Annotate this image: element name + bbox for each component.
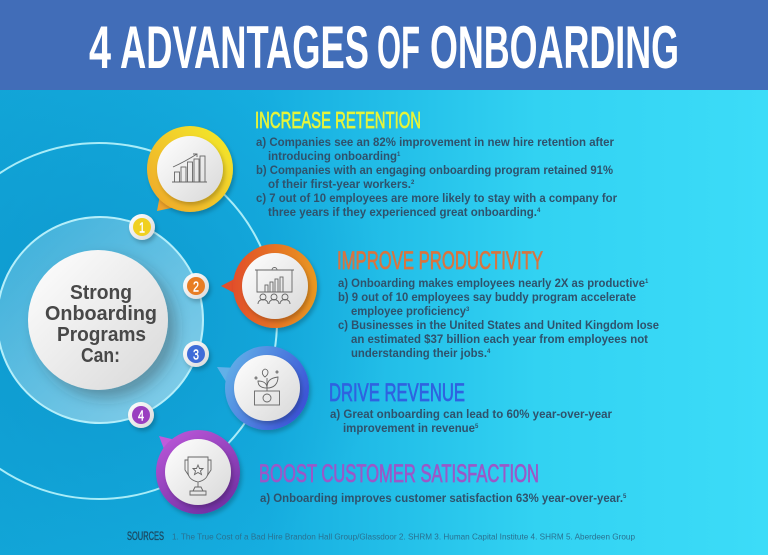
badge 3: [183, 341, 209, 367]
badge 1: [129, 214, 155, 240]
icon: presentation board with audience: [255, 268, 294, 304]
icon: rising bar chart: [172, 154, 207, 182]
text block: productivity points: a) Onboarding makes employees nearly 2X as productive: [338, 278, 645, 290]
text block: revenue points: 5: [475, 424, 479, 430]
panel: drive revenue: [329, 379, 613, 435]
text block: retention points: 1: [397, 152, 401, 158]
text block: productivity points: 3: [466, 307, 470, 313]
heading: increase retention: INCREASE RETENTION: [255, 107, 421, 133]
text block: retention points: of their first-year workers.: [268, 179, 411, 191]
text block: productivity points: [338, 278, 659, 360]
central circle: Strong Onboarding Programs Can: Onboarding: [45, 303, 157, 325]
text block: revenue points: improvement in revenue: [343, 423, 475, 435]
badge 3: 3: [193, 346, 199, 364]
title: [89, 14, 679, 81]
heading: boost customer satisfaction: BOOST CUSTOMER SATISFACTION: [259, 460, 539, 488]
title: OF: [377, 14, 420, 81]
badge 1: 1: [139, 220, 145, 236]
central circle: Strong Onboarding Programs Can: Programs: [57, 324, 146, 346]
central circle: Strong Onboarding Programs Can: Can:: [81, 345, 120, 367]
text block: retention points: introducing onboarding: [268, 151, 397, 163]
title: 4: [89, 14, 111, 81]
text block: satisfaction point: 5: [623, 494, 627, 500]
panel: increase retention: [255, 107, 618, 219]
text block: productivity points: b) 9 out of 10 employees say buddy program accelerate: [338, 292, 636, 304]
text block: retention points: 2: [411, 180, 415, 186]
bubble: productivity: [221, 244, 317, 328]
text block: retention points: [256, 137, 618, 219]
text block: retention points: c) 7 out of 10 employees are more likely to stay with a company for: [256, 193, 618, 205]
title banner: [0, 0, 768, 90]
bubble: customer satisfaction: [156, 430, 240, 514]
panel: improve productivity: [337, 247, 659, 360]
heading: drive revenue: DRIVE REVENUE: [329, 379, 465, 407]
bubble: retention: [147, 126, 233, 212]
text block: productivity points: 1: [645, 279, 649, 285]
text block: productivity points: understanding their jobs.: [351, 348, 487, 360]
sources: 1. The True Cost of a Bad Hire Brandon Hall Group/Glassdoor 2. SHRM 3. Human Capital Institute 4. SHRM 5. Aberdeen Group: [172, 532, 635, 542]
central circle: Strong Onboarding Programs Can: [28, 250, 168, 390]
text block: retention points: three years if they experienced great onboarding.: [268, 207, 537, 219]
icon: trophy: [185, 457, 211, 495]
text block: revenue points: [330, 409, 613, 435]
badge 4: [128, 402, 154, 428]
outer orbit ring: [0, 143, 277, 499]
heading: improve productivity: IMPROVE PRODUCTIVITY: [337, 247, 543, 275]
text block: revenue points: a) Great onboarding can lead to 60% year-over-year: [330, 409, 613, 421]
central circle: Strong Onboarding Programs Can: Strong: [70, 282, 132, 304]
text block: satisfaction point: a) Onboarding improves customer satisfaction 63% year-over-year.: [260, 493, 623, 505]
text block: productivity points: employee proficiency: [351, 306, 467, 318]
badge 2: [183, 273, 209, 299]
text block: productivity points: c) Businesses in the United States and United Kingdom lose: [338, 320, 659, 332]
badge 4: 4: [138, 408, 144, 424]
panel: boost customer satisfaction: [259, 460, 627, 505]
bubble: revenue: [217, 346, 309, 430]
text block: retention points: 4: [537, 208, 541, 214]
inner translucent ring: [0, 217, 203, 423]
text block: productivity points: 4: [487, 349, 491, 355]
text block: productivity points: an estimated $37 billion each year from employees not: [351, 334, 648, 346]
text block: retention points: b) Companies with an engaging onboarding program retained 91%: [256, 165, 613, 177]
title: ADVANTAGES: [120, 14, 369, 81]
sources: SOURCES: [127, 531, 164, 543]
icon: money plant: [254, 369, 280, 405]
text block: retention points: a) Companies see an 82% improvement in new hire retention after: [256, 137, 615, 149]
badge 2: 2: [193, 278, 199, 296]
